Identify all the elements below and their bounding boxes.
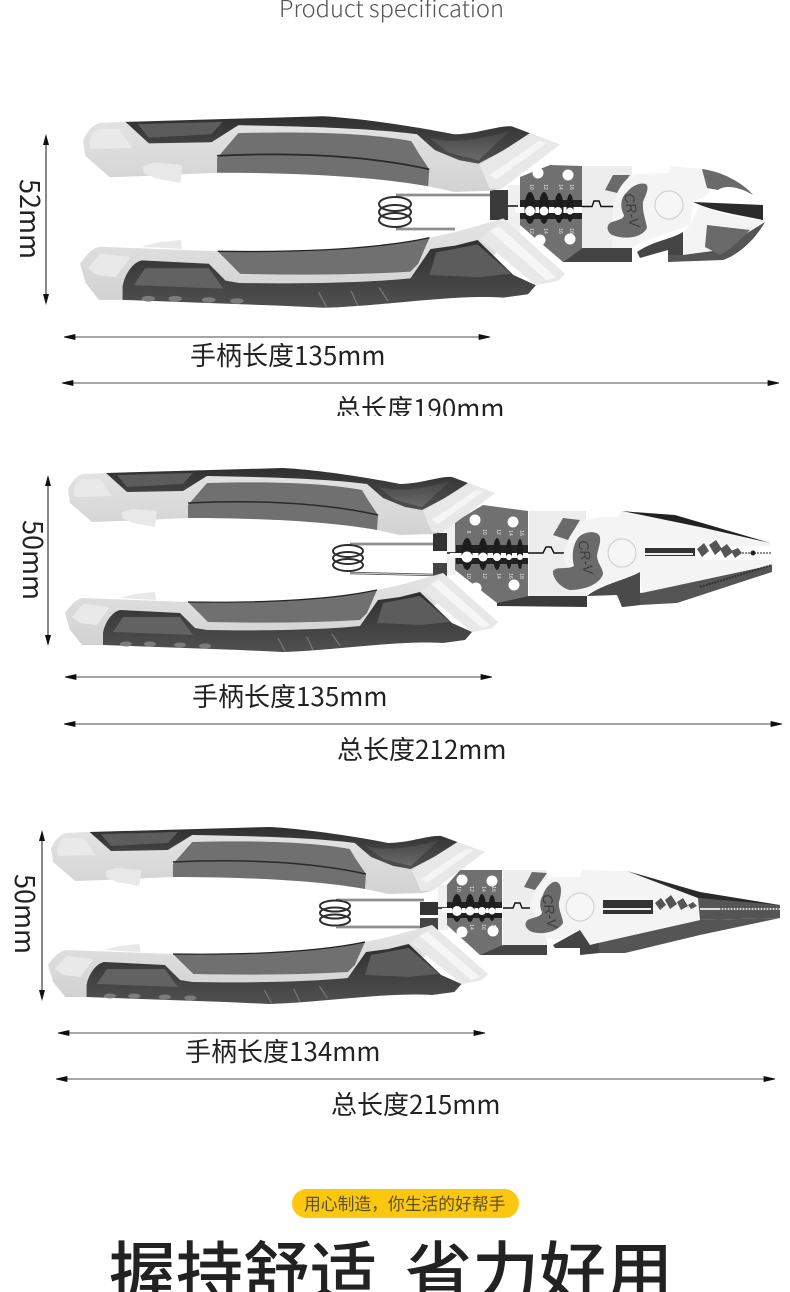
arrow: height xyxy=(47,477,49,644)
label: total length: 总长度190mm xyxy=(335,389,504,426)
arrow: height xyxy=(45,136,47,303)
wire gauge labels: 14 xyxy=(480,886,486,892)
wire gauge labels: 12 xyxy=(481,573,487,579)
wire gauge labels: 14 xyxy=(542,228,548,234)
label: handle length: 手柄长度135mm xyxy=(192,677,387,714)
arrow: handle length xyxy=(64,334,490,340)
wire gauge labels: 10 xyxy=(528,184,534,190)
wire gauge labels: 16 xyxy=(507,573,513,579)
arrow: height xyxy=(41,832,43,999)
label: total length: 总长度212mm xyxy=(337,730,506,767)
arrow: total length xyxy=(62,380,779,386)
wire gauge labels: 16 xyxy=(490,886,496,892)
lower handle xyxy=(65,573,498,652)
head xyxy=(420,870,780,955)
label: 50mm: 50mm xyxy=(7,874,46,954)
steel marking: CR-V xyxy=(621,192,643,230)
dimensions plier 3 xyxy=(7,830,775,1122)
dimensions plier 1 xyxy=(12,134,779,426)
wire gauge labels xyxy=(455,886,496,930)
wire gauge labels: 18 xyxy=(568,228,574,234)
spring xyxy=(333,544,436,575)
dimensions plier 2 xyxy=(15,475,782,767)
steel marking: CR-V xyxy=(539,893,561,931)
label: total length: 总长度215mm xyxy=(331,1085,500,1122)
spring xyxy=(320,900,424,927)
wire gauge labels: 14 xyxy=(495,573,501,579)
arrow: total length xyxy=(56,1076,775,1082)
arrow: handle length xyxy=(65,674,492,680)
label: handle length: 手柄长度135mm xyxy=(190,336,385,373)
wire gauge labels: 10 xyxy=(455,886,461,892)
arrow: total length xyxy=(64,722,782,726)
head xyxy=(490,165,765,262)
wire gauge labels: 18 xyxy=(490,924,496,930)
head xyxy=(433,505,772,607)
upper handle xyxy=(83,116,560,192)
upper handle xyxy=(68,468,495,535)
label: handle length: 手柄长度134mm xyxy=(185,1032,380,1069)
slogan pill: 用心制造，你生活的好帮手 xyxy=(304,1191,505,1215)
arrow: handle length xyxy=(58,1030,485,1036)
label: 52mm: 52mm xyxy=(12,179,51,259)
wire gauge labels: 12 xyxy=(468,886,474,892)
wire gauge labels: 16 xyxy=(480,924,486,930)
wire gauge labels xyxy=(528,184,574,234)
plier 3: long nose xyxy=(48,827,780,1004)
wire gauge labels: 14 xyxy=(507,530,513,536)
lower handle xyxy=(80,219,565,308)
spring xyxy=(379,195,492,229)
plier 1: diagonal cutter xyxy=(80,116,765,308)
wire gauge labels: 10 xyxy=(481,529,487,535)
wire gauge labels xyxy=(465,529,524,579)
plier 2: combination xyxy=(65,468,772,652)
wire gauge labels: 10 xyxy=(465,573,471,579)
label: 50mm: 50mm xyxy=(15,520,54,600)
wire gauge labels: 8 xyxy=(465,531,471,534)
wire gauge labels: 16 xyxy=(518,530,524,536)
wire gauge labels: 12 xyxy=(542,184,548,190)
steel marking: CR-V xyxy=(575,539,597,577)
upper handle xyxy=(51,827,485,894)
wire gauge labels: 12 xyxy=(528,228,534,234)
wire gauge labels: 18 xyxy=(518,573,524,579)
wire gauge labels: 14 xyxy=(557,184,563,190)
wire gauge labels: 12 xyxy=(495,529,501,535)
wire gauge labels: 14 xyxy=(468,924,474,930)
wire gauge labels: 16 xyxy=(568,184,574,190)
main heading xyxy=(109,1220,673,1292)
wire gauge labels: 16 xyxy=(557,228,563,234)
lower handle xyxy=(48,925,488,1004)
